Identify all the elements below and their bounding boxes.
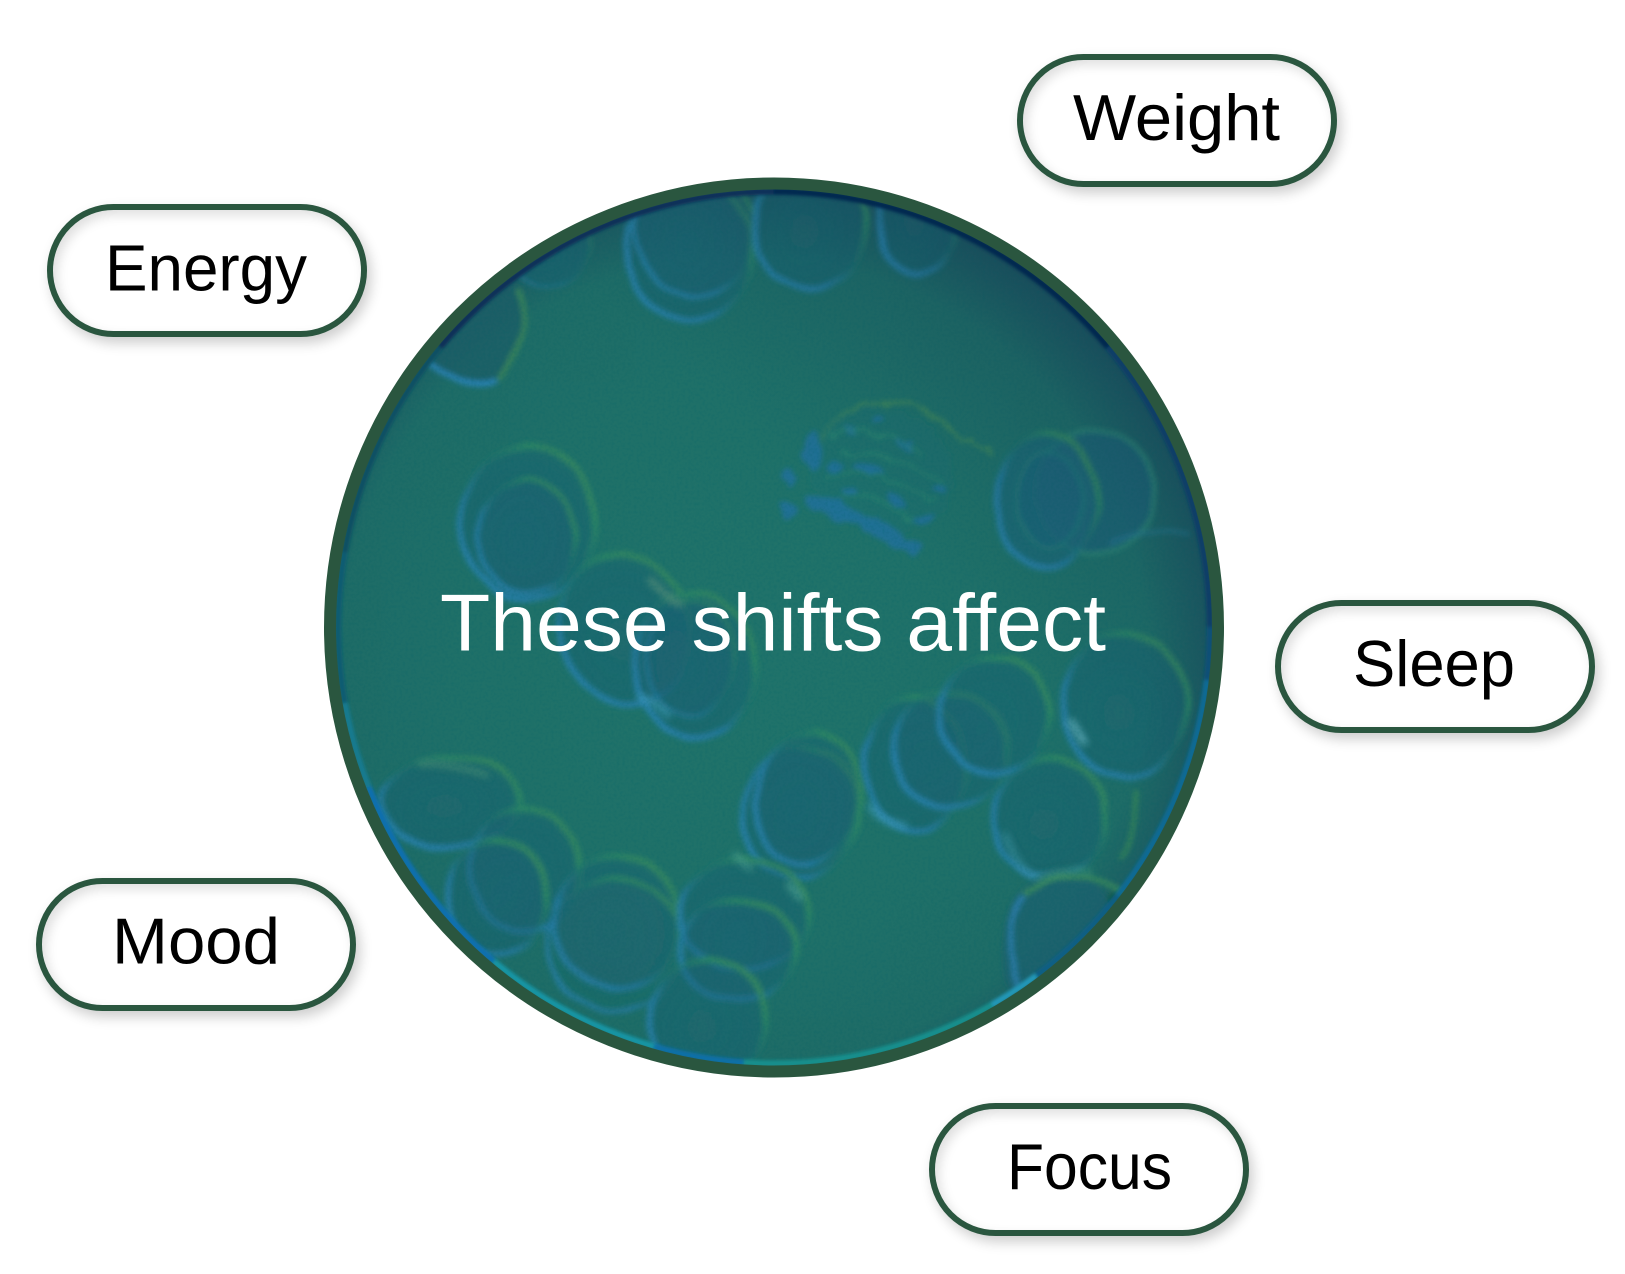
- inner rim reflections: [338, 191, 1210, 1064]
- cells: lower left cluster: [376, 755, 812, 1046]
- cells: left middle pair: [461, 446, 595, 600]
- cells: upper right pair: [997, 430, 1190, 567]
- cell highlights: [420, 580, 1090, 897]
- pill: Focus: Focus: [1006, 1130, 1172, 1202]
- pill: Focus: [929, 1103, 1249, 1236]
- central circle: microscope image of cells: [324, 178, 1224, 1078]
- cells: top edge cluster: [519, 194, 958, 326]
- pill: Sleep: [1275, 600, 1595, 732]
- cells: centre pair under the text: [554, 551, 758, 744]
- pill: Energy: [46, 204, 366, 337]
- cells: lower centre: [736, 730, 865, 883]
- pill: Mood: Mood: [112, 904, 280, 978]
- pill: Energy: Energy: [105, 231, 307, 304]
- central label: These shifts affect: [440, 578, 1106, 668]
- pill: Weight: Weight: [1073, 81, 1280, 154]
- pill: Weight: [1016, 54, 1336, 186]
- cell: upper left edge: [428, 288, 528, 390]
- texture and vignette: [405, 196, 1186, 996]
- platelet cluster: [774, 391, 990, 555]
- cell: lower right edge: [1004, 870, 1120, 988]
- circle outline ring: [330, 184, 1218, 1072]
- image background: [333, 186, 1215, 1068]
- pill: Mood: [36, 878, 356, 1010]
- cells: overlapping stack at right: [865, 633, 1187, 877]
- pill: Sleep: Sleep: [1352, 627, 1514, 700]
